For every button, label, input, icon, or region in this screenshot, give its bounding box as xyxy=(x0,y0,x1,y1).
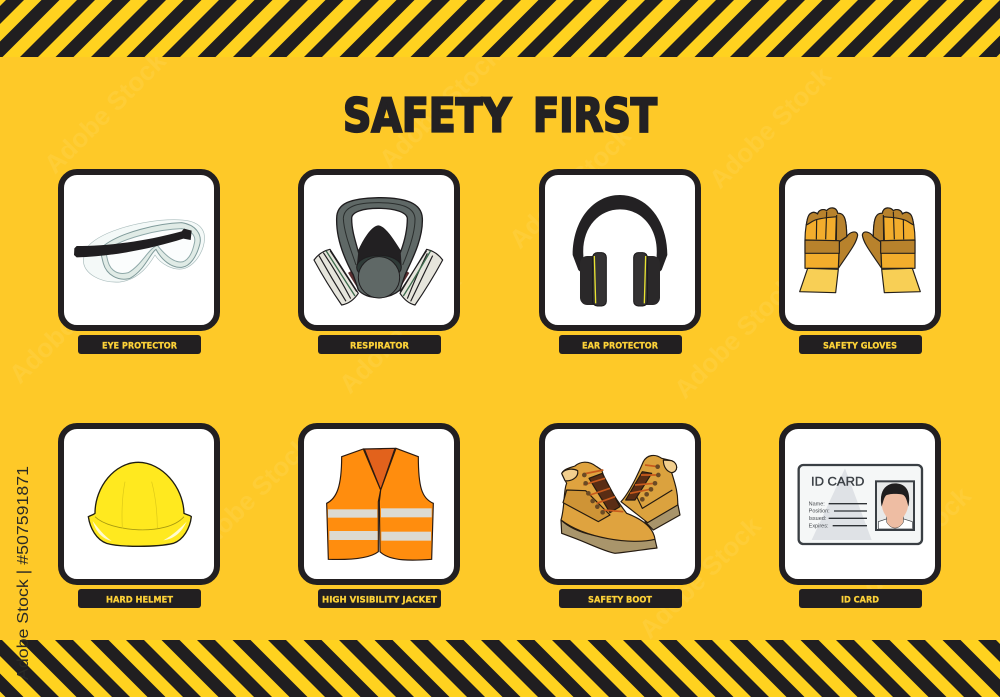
icon: safety goggles xyxy=(74,220,204,282)
panel: safety boot xyxy=(542,426,698,582)
panel: id card xyxy=(782,426,938,582)
panel: respirator xyxy=(301,172,457,328)
icon: id badge xyxy=(799,465,922,544)
top hazard stripe band xyxy=(0,0,1000,57)
label: hard helmet: HARD HELMET xyxy=(106,595,174,605)
panel: safety gloves xyxy=(782,172,938,328)
label: safety boot: SAFETY BOOT xyxy=(588,595,653,605)
icon: id badge: Issued: xyxy=(809,516,827,522)
icon: id badge: Expires: xyxy=(809,523,829,529)
label: id card: ID CARD xyxy=(841,595,879,605)
panel: hard helmet xyxy=(61,426,217,582)
label: ear protector xyxy=(559,335,682,354)
icon: id badge: Name: xyxy=(809,501,825,507)
label: eye protector xyxy=(78,335,201,354)
label: high visibility jacket: HIGH VISIBILITY JACKET xyxy=(322,595,438,605)
label: safety gloves xyxy=(799,335,922,354)
watermark pattern: Adobe Stock xyxy=(843,480,977,614)
watermark pattern: Adobe Stock xyxy=(3,255,137,389)
title xyxy=(343,88,658,142)
panel: high visibility jacket xyxy=(301,426,457,582)
title: SAFETY xyxy=(343,88,512,142)
bottom hazard stripe band xyxy=(0,640,1000,697)
icon: pair of boots xyxy=(561,455,680,553)
watermark pattern: Adobe Stock xyxy=(373,40,507,174)
watermark pattern: Adobe Stock xyxy=(333,265,467,399)
label: hard helmet xyxy=(78,589,201,608)
panel: ear protector xyxy=(542,172,698,328)
watermark pattern: Adobe Stock xyxy=(38,45,172,179)
label: safety boot xyxy=(559,589,682,608)
icon: safety vest xyxy=(327,448,433,560)
label: safety gloves: SAFETY GLOVES xyxy=(823,341,897,351)
icon: id badge: Position: xyxy=(809,509,830,515)
label: eye protector: EYE PROTECTOR xyxy=(102,341,177,351)
panel: eye protector xyxy=(61,172,217,328)
label: respirator: RESPIRATOR xyxy=(350,341,409,351)
watermark pattern: Adobe Stock xyxy=(703,60,837,194)
icon: right glove xyxy=(862,208,920,293)
label: respirator xyxy=(318,335,441,354)
watermark pattern: Adobe Stock xyxy=(668,270,802,404)
watermark pattern: Adobe Stock xyxy=(183,430,317,564)
label: id card xyxy=(799,589,922,608)
label: ear protector: EAR PROTECTOR xyxy=(582,341,658,351)
icon: respirator mask xyxy=(314,198,443,305)
icon: id badge: ID CARD xyxy=(811,475,865,489)
watermark pattern: Adobe Stock xyxy=(503,120,637,254)
icon: ear muffs xyxy=(573,195,667,306)
title: FIRST xyxy=(533,88,658,142)
icon: left glove xyxy=(800,208,858,293)
icon: hard hat xyxy=(88,462,191,546)
label: high visibility jacket xyxy=(318,589,441,608)
watermark pattern: Adobe Stock xyxy=(633,510,767,644)
stock image credit: Adobe Stock | #507591871 xyxy=(15,466,32,680)
